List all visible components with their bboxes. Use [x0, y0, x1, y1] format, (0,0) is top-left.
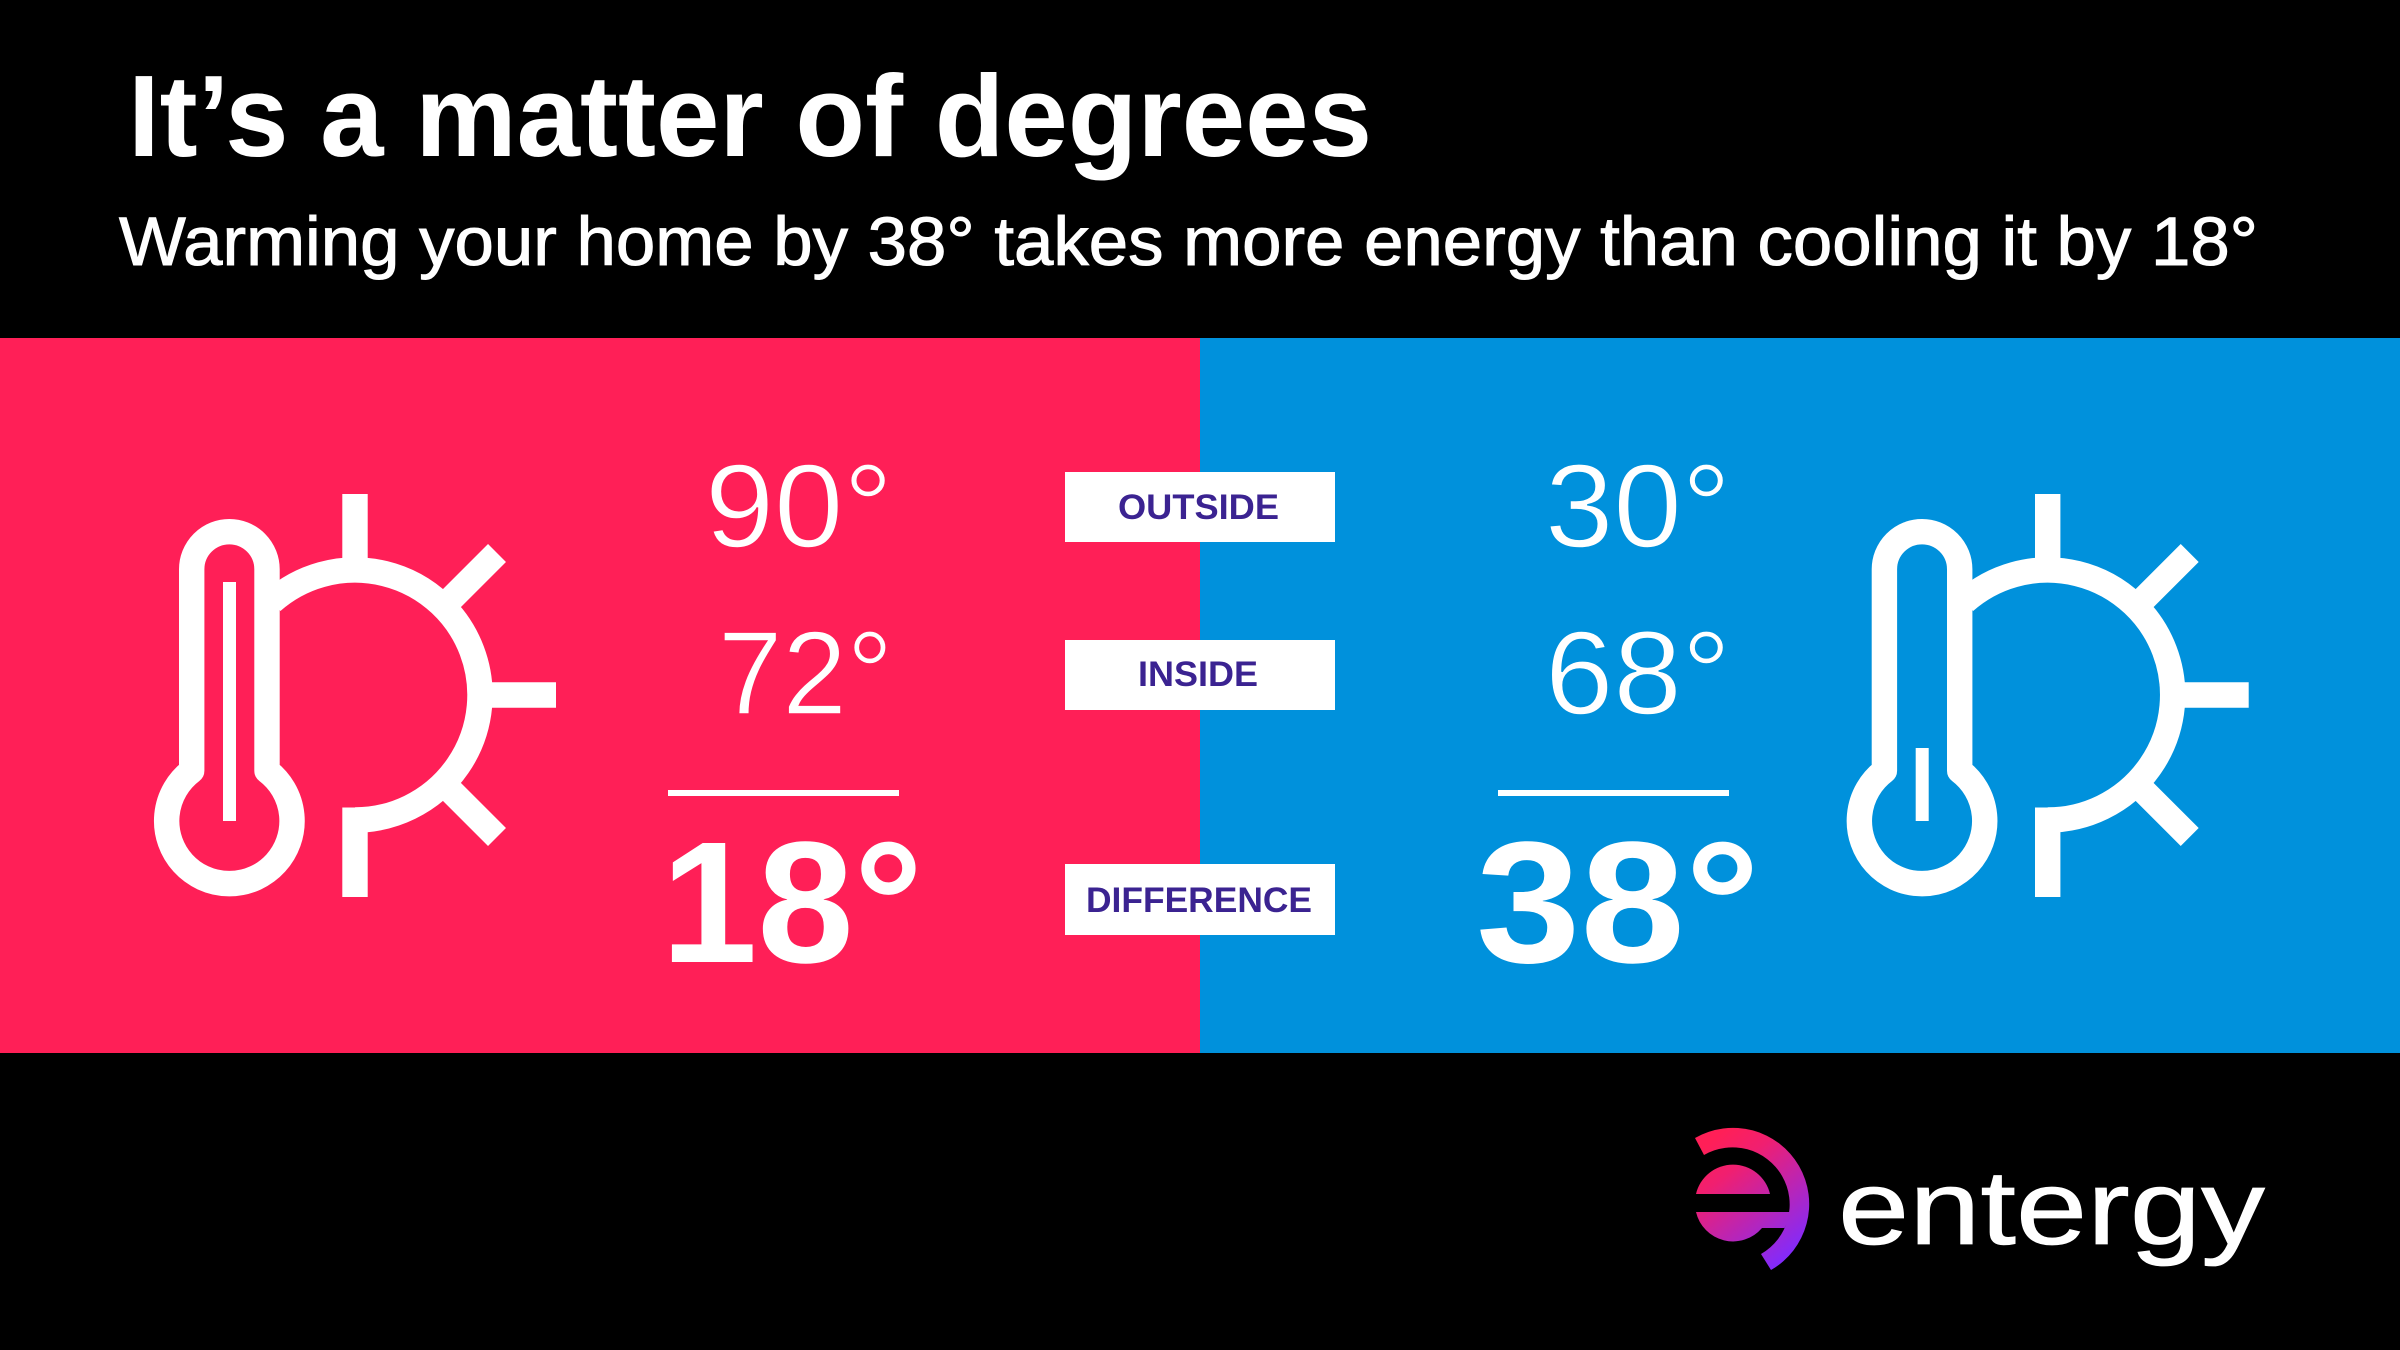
label: difference [1065, 864, 1335, 935]
panel: warm day [0, 338, 1200, 1053]
outside temperature: 30°: 30° [1545, 440, 1731, 573]
icon: thermometer and sun, high reading [167, 494, 556, 897]
label: outside [1065, 472, 1335, 542]
label: inside [1065, 640, 1335, 710]
icon: thermometer and sun, low reading [1859, 494, 2249, 897]
logo mark [1695, 1128, 1809, 1270]
panel: cold day [1200, 338, 2400, 1053]
difference: 38°: 38° [1476, 805, 1760, 999]
wordmark: entergy [1838, 1149, 2265, 1267]
subtraction line [668, 790, 899, 796]
difference: 18°: 18° [661, 805, 923, 999]
label: outside: OUTSIDE [1118, 488, 1279, 527]
subtitle: Warming your home by 38° takes more energy than cooling it by 18° [119, 203, 2258, 280]
subtraction line [1498, 790, 1729, 796]
outside temperature: 90°: 90° [705, 440, 893, 573]
logo: entergy [1695, 1128, 2265, 1270]
label: inside: INSIDE [1138, 655, 1258, 694]
inside temperature: 72°: 72° [718, 607, 893, 740]
title: It’s a matter of degrees [128, 51, 1372, 181]
label: difference: DIFFERENCE [1086, 881, 1312, 920]
inside temperature: 68°: 68° [1545, 607, 1731, 740]
